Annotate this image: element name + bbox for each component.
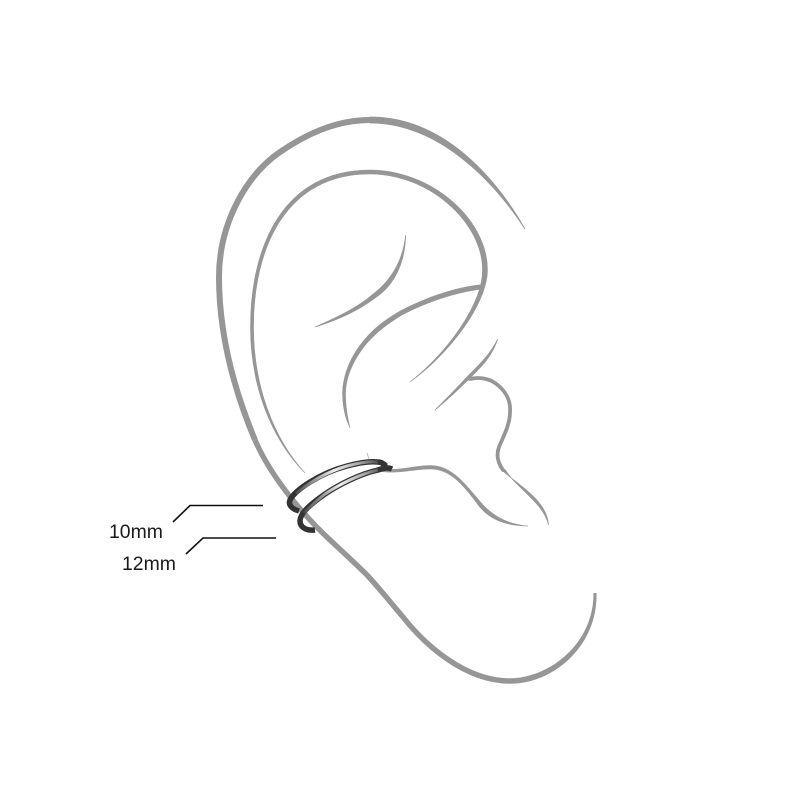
antihelix lower crease [342, 284, 483, 428]
lobe crease line [381, 466, 528, 526]
label: 10mm: 10mm [109, 521, 163, 543]
inner helix line [250, 170, 488, 473]
small tick above hoops [367, 453, 369, 459]
tragus and concha contour [470, 378, 548, 525]
crease above tragus [435, 339, 498, 410]
hoop: 10mm [289, 462, 386, 511]
antihelix upper crease [315, 235, 406, 327]
label: 12mm: 12mm [122, 553, 176, 575]
leader line: 10mm [173, 506, 263, 522]
hoop: 12mm [300, 468, 392, 530]
leader line: 12mm [186, 538, 276, 554]
ear outer contour [219, 117, 597, 684]
double hoop earrings [289, 462, 392, 530]
